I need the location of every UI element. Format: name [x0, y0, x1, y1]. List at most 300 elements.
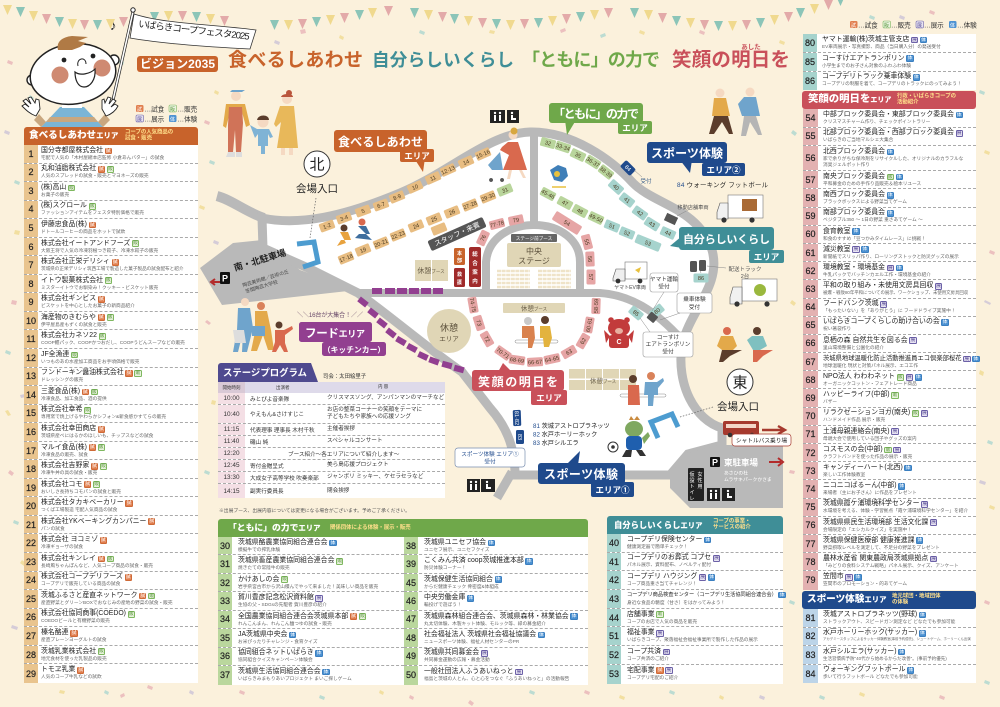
- row 86: [803, 72, 962, 90]
- row 61: 新聞紙でスリッパ作り、ローリングストックと防災グッズの展示: [823, 254, 959, 259]
- row 68: オーガニックコットン・フェアトレード商品: [823, 381, 917, 386]
- central stage: 中央: [526, 246, 542, 256]
- row 77: 77: [805, 539, 816, 549]
- row 86: 体: [914, 75, 919, 80]
- row 42: [607, 571, 783, 590]
- staff and info blocks: 内: [472, 277, 478, 285]
- row 12: 販: [72, 353, 77, 358]
- row 36: 36: [220, 651, 230, 661]
- row 57: 体: [897, 175, 902, 180]
- rest booths: [415, 260, 636, 390]
- legend left: [136, 104, 198, 124]
- row 73: 楽しい工作体験教室: [823, 472, 865, 477]
- panel heading: ともにエリア: 関係団体による体験・展示・販売: [330, 525, 411, 531]
- booths: 食べるしあわせ: 19: [359, 247, 367, 255]
- row 5: 伊藤忠食品(株): [41, 221, 87, 228]
- row 52: 展: [664, 650, 669, 655]
- row 8: 販: [106, 278, 111, 283]
- row 1: 宅配で人気の「木村屋總本店監修 小倉あんバター」の試食: [41, 155, 164, 160]
- row 42: 42: [609, 575, 619, 585]
- illustration: seniors on bench: [515, 316, 558, 348]
- row 63: 63: [805, 284, 816, 294]
- row 72: 販: [886, 448, 890, 452]
- row 39: こくみん共済 coop茨城推進本部: [424, 557, 524, 564]
- row 25: 25: [26, 594, 36, 604]
- row 40: コープデリ保険センター: [627, 536, 702, 543]
- row 23: [24, 553, 198, 572]
- row 5: [24, 219, 198, 238]
- row 42: 体: [709, 575, 714, 580]
- legend left: 展: [137, 117, 142, 123]
- row 77: [803, 535, 976, 553]
- booths: 笑顔の明日を: 63: [565, 349, 574, 357]
- column 38–50: [404, 537, 588, 685]
- row 76: 展: [931, 520, 936, 525]
- row 65: 祝い箸袋作り: [823, 326, 851, 331]
- row 66: 展: [910, 338, 915, 343]
- row 8: [24, 275, 198, 293]
- row 56: 北西ブロック委員会: [823, 148, 885, 155]
- row 32: 岩手県宮古市から沢山積んでやって来ました！美味しい商品を販売: [238, 584, 378, 589]
- row 82: 水戸ホーリーホック(サッカー): [823, 629, 917, 636]
- row 69: 69: [805, 393, 816, 403]
- east parking: [688, 457, 783, 502]
- panel: ともにエリア list: [218, 519, 588, 685]
- row 16: 株式会社幸田商店: [41, 425, 96, 432]
- row 63: [803, 280, 976, 298]
- row 83: 83: [805, 650, 816, 660]
- panel heading: ともにエリア: 「ともに」の力でエリア: [228, 523, 321, 533]
- area label: 笑顔の明日を: 笑顔の明日を: [478, 374, 558, 389]
- booths: ともに: 48: [575, 208, 584, 216]
- 11:40: [218, 436, 445, 448]
- row 3: [24, 182, 198, 201]
- row 85: 体: [908, 56, 912, 61]
- rest booths: 休憩ブース: [590, 376, 617, 385]
- food area label: ＼＼16台が大集合！／／: [297, 311, 363, 319]
- area label: 笑顔の明日を: エリア: [536, 393, 562, 403]
- booths: 食べるしあわせ: 5: [361, 209, 366, 215]
- row 45: 体: [496, 577, 501, 582]
- row 58: 南西ブロック委員会: [823, 191, 885, 198]
- panel: top right exhibitor rows: [803, 34, 976, 90]
- row 40: 40: [609, 538, 619, 548]
- venue map base: roads and white grounds: [200, 132, 783, 508]
- row 6: [24, 238, 198, 256]
- row 24: [24, 572, 198, 590]
- vehicles: mobile store, Yamato EV, delivery trucks: 2台: [741, 272, 750, 280]
- booths: 笑顔の明日を: 76: [480, 234, 488, 243]
- row 35: お米ぴったりチャレンジ・食育クイズ: [238, 639, 318, 644]
- sports team list: 82 水戸ホーリーホック: [533, 430, 597, 438]
- row 19: 19: [26, 483, 36, 493]
- table header: 開始時刻: [222, 384, 240, 390]
- row 12: JF全漁連: [41, 351, 69, 358]
- row 64: 64: [805, 302, 816, 312]
- row 18: 株式会社吉野家: [41, 462, 89, 469]
- booths: 笑顔の明日を: 56: [586, 256, 592, 262]
- row 51: 展: [657, 631, 662, 636]
- row 17: 試: [90, 445, 95, 450]
- 11:40: 磯山 純: [250, 440, 268, 446]
- row 60: 食育教室: [823, 228, 851, 235]
- area label: 笑顔の明日を: [472, 363, 567, 405]
- row 72: コスモスの会(中部): [823, 446, 883, 453]
- row 16: 試: [99, 427, 104, 432]
- reception labels: [455, 270, 712, 467]
- booths: 食べるしあわせ: 24: [412, 223, 420, 231]
- booths: ともに: 47: [560, 200, 569, 208]
- booths: 食べるしあわせ: 6·7: [377, 202, 386, 210]
- legend left: 販: [170, 107, 175, 113]
- row 22: 試: [101, 538, 106, 543]
- ビジョン2035 badge: ビジョン2035: [140, 56, 215, 71]
- row 27: 27: [26, 631, 36, 641]
- panel heading: 食べるしあわせエリア: 食べるしあわせエリア: [29, 130, 118, 141]
- row 18: [24, 460, 198, 479]
- booths: 笑顔の明日を: 73: [474, 319, 482, 327]
- row 83: 水戸シルエラ(サッカー): [823, 648, 896, 655]
- east parking: 女: [697, 471, 703, 478]
- walking football note: 受付: [640, 177, 652, 185]
- row 2: 2: [28, 167, 34, 177]
- row 65: [803, 317, 976, 335]
- row 75: 水環境を考える、体験・学習拠点「霞ケ浦環境科学センター」を紹介: [823, 508, 968, 513]
- row 29: 試: [78, 668, 83, 673]
- row 75: 茨城県霞ケ浦環境科学センター: [823, 500, 919, 507]
- booths: ともに: 38·39: [598, 166, 613, 180]
- row 15: [24, 405, 198, 423]
- row 51: 福祉事業: [627, 629, 655, 636]
- row 80: EV車両展示・写真撮影、商品（当日購入分）の発送受付: [822, 44, 941, 49]
- row 38: 体: [489, 540, 494, 546]
- booths: 笑顔の明日を: 58·59: [594, 299, 600, 313]
- row 30: [218, 537, 404, 555]
- legend left: …体験: [178, 114, 198, 124]
- headline slogans: 笑顔の明日を: [672, 49, 790, 71]
- row 28: 地元食材を使った乳製品の販売: [41, 656, 107, 661]
- panel heading: 食べるしあわせエリア: 試食・販売: [125, 136, 152, 142]
- row 62: [803, 262, 976, 280]
- row 73: 体: [906, 466, 910, 471]
- row 33: [218, 592, 404, 611]
- staff and info blocks: 護: [457, 279, 462, 286]
- row 53: 宅配事業: [627, 667, 655, 674]
- staff and info blocks: 合: [472, 259, 478, 267]
- booths: 自分らしいくらし: [603, 179, 708, 321]
- 10:40: [218, 405, 445, 424]
- row 38: ユニセフ展示、ユニセフクイズ: [424, 547, 490, 552]
- 10:40: お店の整菜コーナーの笑顔をテーマに: [327, 407, 422, 413]
- row 23: 販: [108, 557, 113, 562]
- booths: 笑顔の明日を: 79: [513, 217, 520, 225]
- booths: 食べるしあわせ: 22·23: [391, 230, 406, 241]
- illustration: shopping family: [233, 298, 293, 352]
- legend left: …試食: [144, 106, 165, 114]
- row 59: ベジタブル350 ～ 1日の野菜 重さあてゲーム ～: [823, 217, 923, 222]
- illustration: woman with stroller: [488, 128, 527, 182]
- row 79: [803, 571, 907, 590]
- row 27: 産直プレーンヨーグルトの試食: [41, 637, 106, 642]
- stage program table: [218, 382, 445, 498]
- row 25: [24, 590, 198, 609]
- row 57: 57: [805, 175, 816, 185]
- row 36: [218, 648, 404, 666]
- row 41: 41: [609, 557, 619, 567]
- row 18: 試: [92, 464, 97, 469]
- row 44: 店舗事業: [627, 611, 655, 618]
- row 13: ドレッシングの販売: [41, 377, 83, 382]
- row 83: 体: [899, 650, 904, 654]
- rest area circle: [427, 309, 471, 353]
- row 47: 体: [572, 614, 576, 619]
- panel heading: 笑顔の明日をエリア: 行政・いばらきコープの: [897, 94, 956, 100]
- row 44: [607, 609, 783, 627]
- booths: 自分らしいくらし: 86: [698, 276, 704, 282]
- row 58: 58: [805, 193, 816, 203]
- row 79: 笠間市: [823, 573, 844, 580]
- panel heading: 食べるしあわせエリア: [24, 127, 198, 145]
- row 10: 試: [99, 315, 104, 320]
- row 44: コープのお店で人気の商品を販売: [627, 619, 697, 624]
- row 46: 輪投げで遊ぼう！: [424, 602, 462, 607]
- row 6: 6: [28, 242, 34, 252]
- row 19: 販: [94, 482, 99, 487]
- booths: スポーツ体験: 84: [623, 164, 632, 173]
- row 76: 茨城県県民生活環境部 生活文化課: [823, 519, 928, 526]
- row 69: バザー: [823, 399, 837, 404]
- row 28: 販: [99, 649, 104, 654]
- row 10: [24, 312, 198, 330]
- row 52: コープ共済: [627, 648, 661, 655]
- row 41: 展: [714, 556, 719, 561]
- row 73: キャンディーハート(北西): [823, 464, 903, 471]
- row 14: 販: [92, 390, 97, 395]
- booths: ともに: 49·50: [588, 213, 603, 225]
- row 61: [803, 244, 976, 262]
- row 29: 29: [26, 669, 36, 679]
- row 17: [24, 442, 198, 460]
- row 72: 展: [895, 448, 899, 452]
- row 53: コープデリ宅配のご紹介: [627, 675, 678, 680]
- row 31: 販: [337, 559, 342, 564]
- rest area circle: エリア: [439, 335, 459, 343]
- row 70: ハンドメイド作品 展示・販売: [823, 417, 885, 422]
- row 20: 20: [26, 501, 36, 511]
- row 25: 販: [149, 594, 154, 599]
- legend right: [850, 20, 977, 30]
- row 15: 販: [85, 408, 90, 413]
- row 69: [803, 389, 976, 408]
- row 49: 展: [482, 651, 487, 656]
- row 62: 体: [897, 266, 902, 271]
- row 48: 48: [406, 633, 416, 643]
- row 44: 販: [657, 612, 662, 617]
- row 75: 75: [805, 502, 816, 512]
- headline slogans: [228, 43, 790, 71]
- row 80: [803, 34, 976, 53]
- row 57: 販: [888, 175, 893, 180]
- row 35: 35: [220, 633, 230, 643]
- headline slogans: あした: [741, 43, 761, 51]
- booths: 笑顔の明日を: 57: [587, 274, 593, 280]
- row 18: 18: [26, 464, 36, 474]
- food area label: [297, 311, 386, 356]
- illustration: running kids east: [717, 327, 773, 362]
- row 1: 試: [106, 148, 111, 154]
- row 76: 76: [805, 520, 816, 530]
- legend left: …展示: [144, 116, 165, 124]
- row 81: 茨城アストロプラネッツ(野球): [823, 611, 917, 618]
- row 40: [607, 534, 783, 553]
- row 16: 茨城県産べにはるかのほしいも、チップスなどの試食: [41, 433, 153, 438]
- staff and info blocks: [427, 217, 487, 287]
- row 63: 展: [936, 284, 941, 289]
- row 76: 会場限定の「エシカルクイズ」を実施中！: [823, 527, 912, 532]
- 12:45: 美ら島応援プロジェクト: [327, 462, 389, 468]
- row 33: 展: [317, 596, 321, 601]
- 10:00: みとぴよ音楽隊: [250, 396, 289, 402]
- row 18: 冷凍牛丼の具の試食・販売: [41, 470, 97, 475]
- row 1: 1: [28, 149, 34, 159]
- booths: 自分らしいくらし: 52: [623, 230, 631, 238]
- row 7: 試: [113, 260, 118, 265]
- row 40: 健康測定器で簡単チェック！: [627, 544, 688, 549]
- row 24: 株式会社コープデリフーズ: [41, 573, 123, 580]
- row 79: 体: [856, 575, 860, 580]
- row 60: [803, 226, 976, 244]
- 14:15: [218, 484, 350, 498]
- reception labels: コーすけ: [657, 334, 680, 341]
- booths: 食べるしあわせ: 10: [411, 184, 419, 192]
- area label: ともに: エリア: [622, 123, 648, 133]
- south-north parking: 笠間陶芸大学校: [245, 278, 279, 295]
- booths: ともに: 32: [544, 140, 552, 148]
- booths: 自分らしいくらし: 41: [622, 197, 631, 205]
- row 37: 体: [324, 670, 328, 675]
- row 78: 農林水産省 関東農政局茨城県拠点: [823, 555, 928, 562]
- restroom icons: [467, 110, 735, 501]
- row 28: [24, 646, 198, 664]
- booths: 自分らしいくらし: 80: [653, 307, 662, 316]
- row 81: 81: [805, 613, 816, 623]
- exhibitor columns: [218, 537, 588, 685]
- row 5: ドトールコーヒーの商品をホットで試飲: [41, 229, 125, 234]
- sports team list: 83 水戸シルエラ: [533, 439, 579, 447]
- booths: 食べるしあわせ: 8·9: [392, 194, 402, 202]
- row 51: 51: [609, 631, 619, 641]
- row 56: [803, 146, 976, 171]
- row 34: れんこんまん、れんこん麺つゆの試食・販売: [238, 621, 332, 626]
- row 13: フンドーキン醤油株式会社: [41, 369, 124, 376]
- row 14: 冷凍食品、加工食品、酒の提供: [41, 396, 107, 401]
- row 66: [803, 335, 976, 353]
- row 83: 生活習慣病予防"40代から始めるからだ改善"。(事前予約優先): [823, 656, 947, 661]
- panel heading: 笑顔の明日をエリア: [802, 91, 976, 109]
- 10:40: 子どもたちや家族への応援ソング: [327, 414, 411, 420]
- area label: ともに: 「ともに」の力で: [553, 106, 639, 121]
- panel heading: スポーツ体験エリア: 地元球団・地域団体: [892, 594, 941, 600]
- south-north parking: 南・北駐車場: [232, 247, 287, 273]
- area label: スポーツ体験 1: エリア①: [595, 485, 630, 495]
- row 14: 14: [26, 390, 36, 400]
- row 49: 共同募金運動の広報・募金活動: [424, 657, 490, 662]
- row 14: [24, 386, 198, 405]
- row 80: 80: [805, 38, 815, 48]
- row 84: 84: [805, 669, 816, 679]
- 12:20: 12:20: [224, 450, 240, 457]
- row 84: 歩いて行うフットボール どなたでも参加可能: [823, 674, 918, 679]
- row 61: 減災教室: [823, 246, 851, 253]
- booths: ともに: [496, 137, 615, 225]
- legend right: 販: [884, 23, 889, 29]
- row 26: 26: [26, 612, 36, 622]
- row 46: 体: [468, 596, 473, 601]
- row 68: 展: [907, 375, 912, 380]
- row 34: 販: [360, 614, 365, 619]
- east parking: 仮: [689, 471, 695, 478]
- row 47: [404, 611, 588, 629]
- row 2: 人気のスプレッドの試食・販売とマヨネーズの販売: [41, 173, 149, 178]
- row 30: 模擬牛での搾乳体験: [238, 547, 280, 552]
- row 6: 株式会社イートアンドフーズ: [41, 240, 130, 247]
- staff and info blocks: 案: [472, 268, 478, 276]
- row 82: アカデミースタッフによるサッカー体験教室(事前予約優先)、シュートゲーム、ホーリーくん出演: [823, 637, 971, 641]
- row 13: 試: [126, 371, 131, 376]
- row 66: 66: [805, 338, 816, 348]
- booths: 笑顔の明日を: 60·61: [586, 318, 594, 333]
- row 77: 野菜摂取レベルを測定して、不足分の野菜をプレゼント: [823, 545, 940, 550]
- area label: スポーツ体験 2: [647, 142, 745, 176]
- row 62: 62: [805, 266, 816, 276]
- row 24: 試: [126, 575, 131, 580]
- north entrance: 会場入口: [296, 182, 338, 195]
- sports team list: 81 茨城アストロプラネッツ: [533, 422, 610, 430]
- booths: 食べるしあわせ: 12·13: [441, 165, 456, 177]
- illustration: blue bird mascot: [550, 165, 568, 187]
- row 60: 体: [853, 229, 858, 234]
- booths: スポーツ体験: 81·82: [513, 411, 519, 425]
- row 33: 33: [220, 596, 230, 606]
- row 78: [803, 553, 976, 571]
- row 70: リラクゼーションヨガ(南央): [823, 409, 910, 416]
- row 17: マルイ食品(株): [41, 444, 87, 451]
- vehicles: mobile store, Yamato EV, delivery trucks: [613, 195, 777, 323]
- row 65: 65: [805, 320, 816, 330]
- row 85: コーすけエアトランポリン: [822, 55, 905, 62]
- row 6: 大阪王将で人気の冷凍羽根つき餃子、冷凍水餃子の販売: [41, 248, 158, 253]
- row 86: コープデリトラック乗車体験: [822, 73, 911, 80]
- row 4: (株)スクロール: [41, 202, 87, 209]
- booths: ともに: 35: [573, 152, 582, 160]
- row 80: 展: [912, 38, 917, 42]
- row 35: JA茨城県中央会: [238, 631, 287, 638]
- panel: 食べるしあわせエリア list: [24, 127, 198, 683]
- row 41: コープデリのお葬式 コプセ: [627, 554, 711, 561]
- row 32: 32: [220, 578, 230, 588]
- row 81: 体: [920, 612, 925, 618]
- row 24: 24: [26, 575, 36, 585]
- 11:15: 代表理事 理事長 木村千秋: [250, 428, 315, 434]
- panel heading: 自分らしいくらしエリア: コープの事業・: [713, 519, 750, 525]
- row 9: 9: [28, 297, 34, 307]
- row 39: 防災体験コーナー！: [424, 565, 466, 570]
- illustration: couple on bench: [620, 372, 666, 406]
- legend right: 体: [950, 22, 955, 29]
- row 19: 株式会社コモ: [41, 481, 82, 488]
- row 1: [24, 145, 198, 164]
- panel: 笑顔の明日をエリア list: [802, 91, 980, 590]
